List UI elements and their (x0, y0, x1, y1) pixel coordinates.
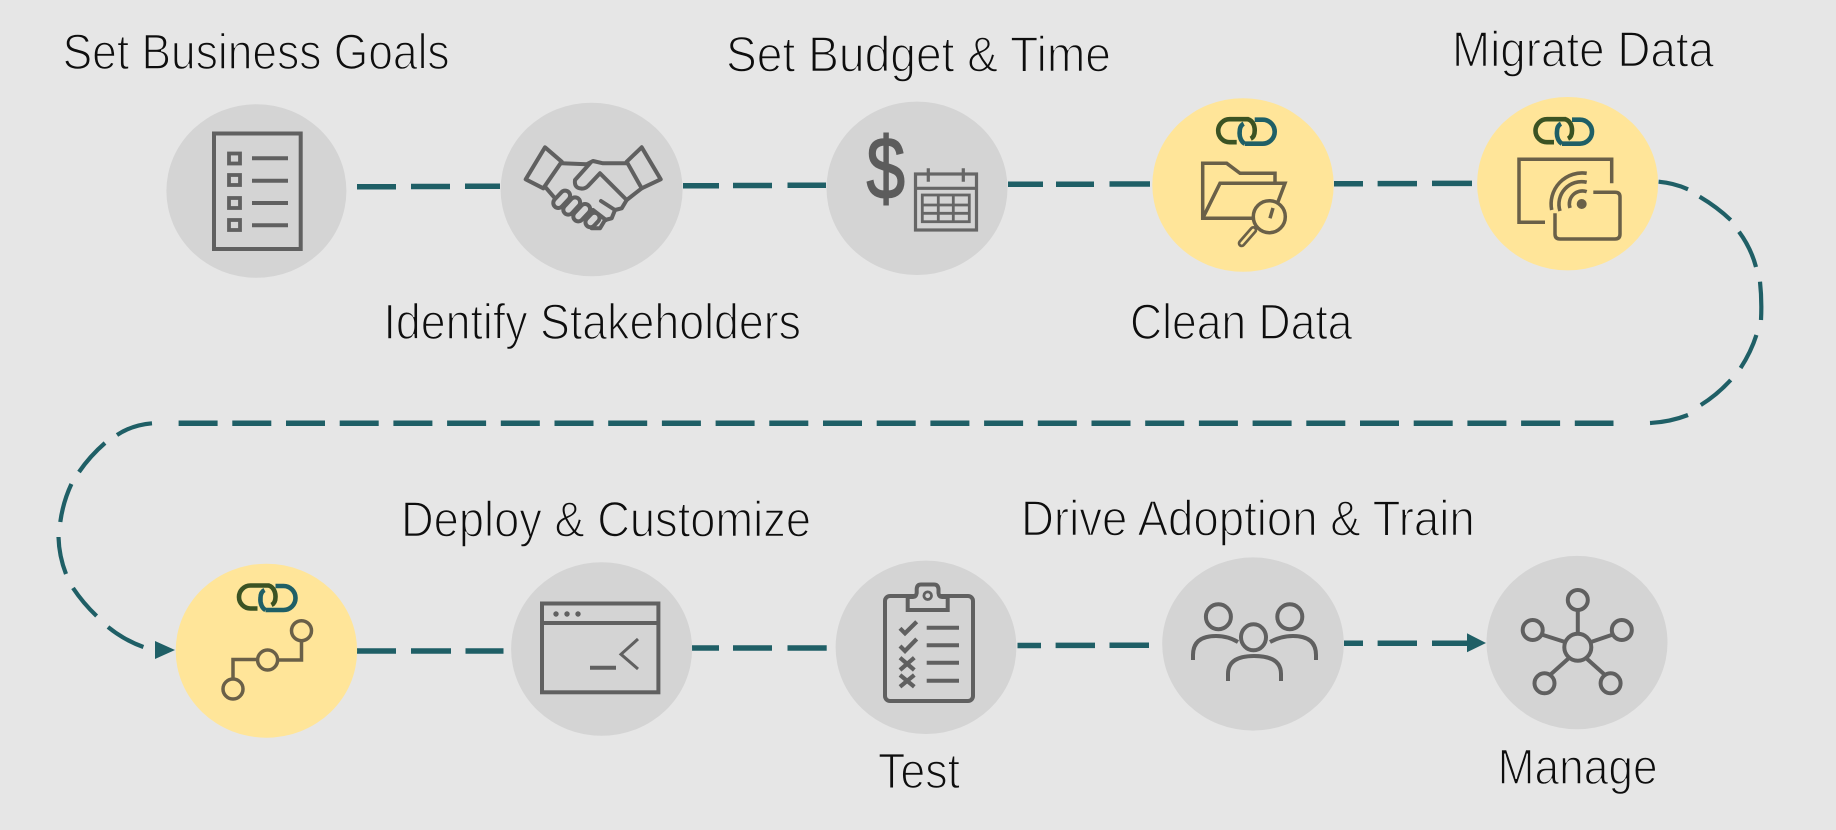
label: Set Budget & Time: Set Budget & Time (726, 27, 1111, 83)
step: Set Business Goals (166, 104, 346, 278)
arrowhead: entering Manage step (1467, 633, 1486, 652)
label: Test: Test (878, 743, 960, 799)
label: Migrate Data: Migrate Data (1452, 22, 1714, 78)
step: Set Budget & Time (826, 102, 1008, 275)
connector: dashed path through all steps (58, 182, 1761, 651)
icon: chain link (1536, 119, 1592, 144)
icon: calendar (916, 168, 976, 230)
icon: checklist document (214, 134, 301, 249)
label: Manage: Manage (1498, 739, 1658, 795)
arrowhead: entering Configure step (155, 641, 175, 659)
icon: connected workflow path (223, 621, 312, 699)
label: Deploy & Customize: Deploy & Customize (401, 492, 811, 548)
label: Identify Stakeholders: Identify Stakeholders (384, 294, 801, 350)
icon: dollar sign: $ (866, 118, 905, 218)
step: Configure (highlighted) (176, 564, 357, 738)
step: Manage (1486, 556, 1668, 729)
step: Identify Stakeholders (501, 103, 683, 276)
step: Test (836, 561, 1016, 734)
step: Deploy & Customize (511, 562, 692, 736)
icon: wireless data transfer (1519, 159, 1620, 239)
icon: hub network (1523, 590, 1632, 693)
icon: chain link (1218, 119, 1275, 144)
icon: test clipboard checklist (885, 584, 973, 701)
icon: handshake (526, 147, 661, 229)
icon: group of people (1193, 604, 1316, 681)
icon: chain link (239, 586, 296, 610)
step: Migrate Data (1477, 97, 1658, 270)
label: Drive Adoption & Train: Drive Adoption & Train (1021, 491, 1475, 547)
step: Clean Data (1152, 98, 1334, 272)
icon: terminal window (542, 604, 658, 692)
label: Clean Data: Clean Data (1130, 294, 1353, 350)
label: Set Business Goals: Set Business Goals (63, 24, 450, 80)
icon: folder with magnifier (1203, 163, 1285, 243)
step: Drive Adoption & Train (1162, 557, 1344, 731)
